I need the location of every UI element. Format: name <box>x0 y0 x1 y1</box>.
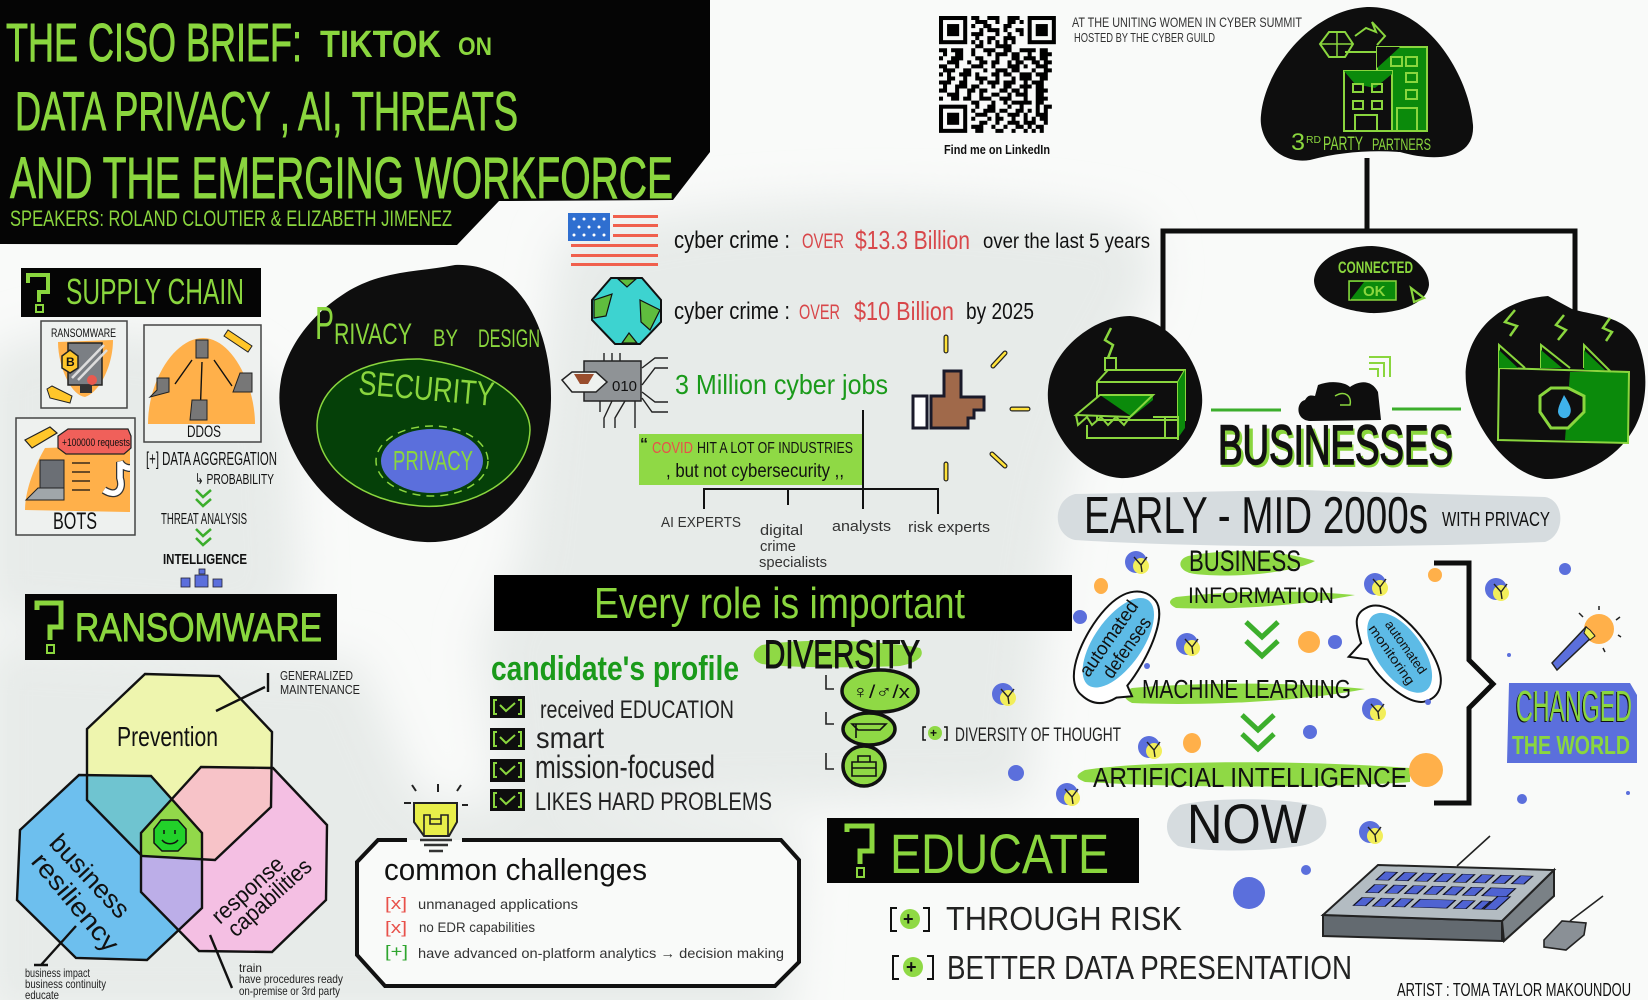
diversity section: ♀/♂/x <box>852 682 910 702</box>
title banner: DATA PRIVACY , AI, THREATS <box>15 80 518 142</box>
badge: connected ok: CONNECTED <box>1338 258 1413 277</box>
panel: 3rd party partners: 3 <box>1291 129 1305 156</box>
heading: every role: Every role is important <box>594 579 965 628</box>
title banner: ON <box>458 33 492 61</box>
stat: cyber crime global: by 2025 <box>966 298 1034 324</box>
note: train: have procedures ready <box>239 972 343 986</box>
note: diversity of thought <box>923 725 1121 746</box>
note: diversity of thought: DIVERSITY OF THOUGHT <box>955 725 1121 746</box>
heading: supply chain: SUPPLY CHAIN <box>66 271 244 312</box>
stat: cyber crime us: OVER <box>802 230 844 253</box>
quote: covid: HIT A LOT OF INDUSTRIES <box>697 440 853 457</box>
icon: light bulb <box>404 784 468 851</box>
panel: privacy by design: PRIVACY <box>393 445 473 476</box>
org tree: roles: AI EXPERTS <box>661 514 741 531</box>
text flow: data aggregation to intelligence: ↳ PROBABILITY <box>195 471 274 488</box>
icon: chip with eye: 010 <box>612 378 637 395</box>
summit note <box>1072 14 1302 45</box>
stat: cyber crime us: over the last 5 years <box>983 230 1150 253</box>
org tree: roles: specialists <box>759 554 827 571</box>
panel: 3rd party partners <box>1261 7 1473 161</box>
panel: common challenges: no EDR capabilities <box>419 919 535 935</box>
note: train: train <box>239 961 262 975</box>
panel: privacy by design: RIVACY <box>334 318 412 351</box>
era pill: early-mid 2000s: EARLY - MID 2000s <box>1084 487 1428 545</box>
icon: magic wand <box>1552 606 1621 670</box>
venn diagram <box>17 673 327 988</box>
era pill: early-mid 2000s: WITH PRIVACY <box>1442 509 1550 531</box>
venn diagram: Prevention <box>117 721 218 752</box>
note: business impact <box>25 966 106 1000</box>
stat: cyber crime us <box>674 225 1150 255</box>
text flow: data aggregation to intelligence: THREAT ANALYSIS <box>161 511 247 528</box>
heading: supply chain <box>21 268 261 317</box>
heading: businesses <box>1211 357 1461 479</box>
panel: privacy by design: SECURITY <box>357 364 496 414</box>
diversity section: DIVERSITY <box>764 633 920 677</box>
quote: covid: “ <box>640 436 648 453</box>
note: train: on-premise or 3rd party <box>239 984 340 998</box>
background wash blobs <box>0 200 1154 1000</box>
note: train <box>239 961 343 998</box>
speech bubble: automated monitoring: automated <box>1382 617 1430 677</box>
bullet: better data presentation: BETTER DATA PRESENTATION <box>947 949 1352 986</box>
card: ransomware: B <box>66 355 75 369</box>
heading: ransomware <box>25 594 337 660</box>
note: diversity of thought: + <box>930 726 937 740</box>
panel: privacy by design: DESIGN <box>478 325 540 353</box>
note: generalized maintenance: MAINTENANCE <box>280 682 360 697</box>
text flow: data aggregation to intelligence <box>146 449 277 587</box>
bullet: through risk: + <box>903 909 914 929</box>
icon: globe <box>592 278 661 344</box>
icon: keyboard and usb <box>1323 836 1603 950</box>
summit note: AT THE UNITING WOMEN IN CYBER SUMMIT <box>1072 14 1302 30</box>
text flow: data aggregation to intelligence: INTELLIGENCE <box>163 551 247 568</box>
stat: cyber crime global: cyber crime : <box>674 298 790 325</box>
timeline: business to ai: ARTIFICIAL INTELLIGENCE <box>1093 762 1407 793</box>
panel: privacy by design: BY <box>433 325 458 352</box>
stat: cyber jobs: 3 Million cyber jobs <box>675 369 888 400</box>
org tree: roles: risk experts <box>908 519 990 536</box>
icon: shop on black blob <box>1048 316 1202 478</box>
org tree: roles <box>661 410 990 571</box>
speech bubble: automated defenses: defenses <box>1099 613 1156 683</box>
title banner <box>0 0 710 245</box>
panel: common challenges: unmanaged applications <box>418 896 578 912</box>
title banner: SPEAKERS: ROLAND CLOUTIER & ELIZABETH JIMENEZ <box>10 206 452 231</box>
timeline: business to ai: BUSINESS <box>1189 545 1301 578</box>
heading: candidate profile: candidate's profile <box>491 650 739 688</box>
checklist: candidate traits: smart <box>536 722 605 755</box>
summit note: HOSTED BY THE CYBER GUILD <box>1074 30 1215 45</box>
icon: factory on black blob <box>1466 296 1645 479</box>
speech bubble: automated defenses <box>1056 578 1185 720</box>
diversity section <box>754 633 922 786</box>
checklist: candidate traits: LIKES HARD PROBLEMS <box>535 788 772 816</box>
timeline: business to ai: MACHINE LEARNING <box>1142 674 1351 704</box>
card: ransomware <box>41 321 127 408</box>
card: ddos <box>144 325 261 442</box>
panel: common challenges: [+] <box>385 942 408 961</box>
heading: businesses: BUSINESSES <box>1219 416 1454 479</box>
org tree: roles: digital <box>760 522 803 539</box>
venn diagram: resiliency <box>25 847 126 958</box>
panel: common challenges <box>357 840 799 986</box>
stat: cyber crime us: $13.3 Billion <box>855 225 970 255</box>
badge: connected ok: OK <box>1363 283 1386 300</box>
icon: us flag <box>568 213 658 266</box>
bullet: through risk: THROUGH RISK <box>946 900 1182 937</box>
icon: thumbs up with rays <box>913 337 1028 479</box>
icon: chip with eye <box>562 353 668 428</box>
panel: common challenges: [x] <box>385 918 407 937</box>
stat: cyber crime global <box>674 296 1034 326</box>
title banner: THE CISO BRIEF: <box>6 13 302 73</box>
bracket <box>1434 563 1493 803</box>
card: ddos: DDOS <box>187 422 221 441</box>
quote: covid: , but not cybersecurity ,, <box>666 461 844 482</box>
note: generalized maintenance: GENERALIZED <box>280 668 353 683</box>
heading: educate: EDUCATE <box>890 822 1109 885</box>
panel: common challenges: [x] <box>385 894 407 913</box>
card: bots: +100000 requests <box>62 437 130 449</box>
speech bubble: automated defenses: automated <box>1076 597 1143 681</box>
card: bots: BOTS <box>53 508 97 535</box>
card: ransomware: RANSOMWARE <box>51 326 116 340</box>
panel: privacy by design <box>279 265 551 542</box>
heading: ransomware: RANSOMWARE <box>75 606 322 650</box>
checklist: candidate traits: received EDUCATION <box>540 696 734 724</box>
title banner: AND THE EMERGING WORKFORCE <box>10 146 673 211</box>
callout: changed the world <box>1507 682 1637 763</box>
stat: cyber crime global: OVER <box>799 301 840 324</box>
qr code <box>939 18 1054 131</box>
quote: covid: COVID <box>652 440 693 457</box>
bullet: better data presentation: + <box>906 957 917 977</box>
card: bots <box>16 418 135 535</box>
panel: 3rd party partners: RD <box>1306 135 1321 146</box>
venn diagram: response <box>206 851 289 929</box>
venn diagram: business <box>44 828 136 924</box>
stat: cyber crime global: $10 Billion <box>854 296 954 326</box>
decorative dots field <box>992 551 1630 909</box>
qr caption: Find me on LinkedIn <box>944 142 1050 157</box>
timeline: business to ai: INFORMATION <box>1188 583 1334 608</box>
title banner: TIKTOK <box>320 24 441 66</box>
quote: covid <box>639 434 864 485</box>
checklist: candidate traits <box>490 696 772 816</box>
panel: common challenges: have advanced on-platform analytics → decision making <box>418 945 784 961</box>
checklist: candidate traits: mission-focused <box>535 749 715 785</box>
note: business impact: business continuity <box>25 977 106 991</box>
note: business impact: business impact <box>25 966 90 980</box>
era pill: now: NOW <box>1187 792 1307 855</box>
panel: common challenges: common challenges <box>384 852 647 887</box>
org tree: roles: analysts <box>832 518 891 535</box>
speech bubble: automated monitoring <box>1331 591 1454 724</box>
panel: privacy by design: P <box>315 297 334 349</box>
badge: connected ok <box>1314 246 1429 313</box>
heading: businesses: BUSINESSES <box>1218 413 1453 476</box>
panel: 3rd party partners: PARTY <box>1323 134 1363 155</box>
speech bubble: automated monitoring: monitoring <box>1366 622 1418 688</box>
heading: every role <box>494 575 1072 631</box>
note: generalized maintenance <box>280 668 360 697</box>
venn diagram: capabilities <box>222 853 317 942</box>
timeline: business to ai <box>1078 545 1410 793</box>
panel: 3rd party partners: PARTNERS <box>1372 135 1431 154</box>
org tree: roles: crime <box>760 538 796 555</box>
stat: cyber crime us: cyber crime : <box>674 227 790 254</box>
text flow: data aggregation to intelligence: [+] DATA AGGREGATION <box>146 449 277 469</box>
connector lines <box>1163 158 1575 330</box>
